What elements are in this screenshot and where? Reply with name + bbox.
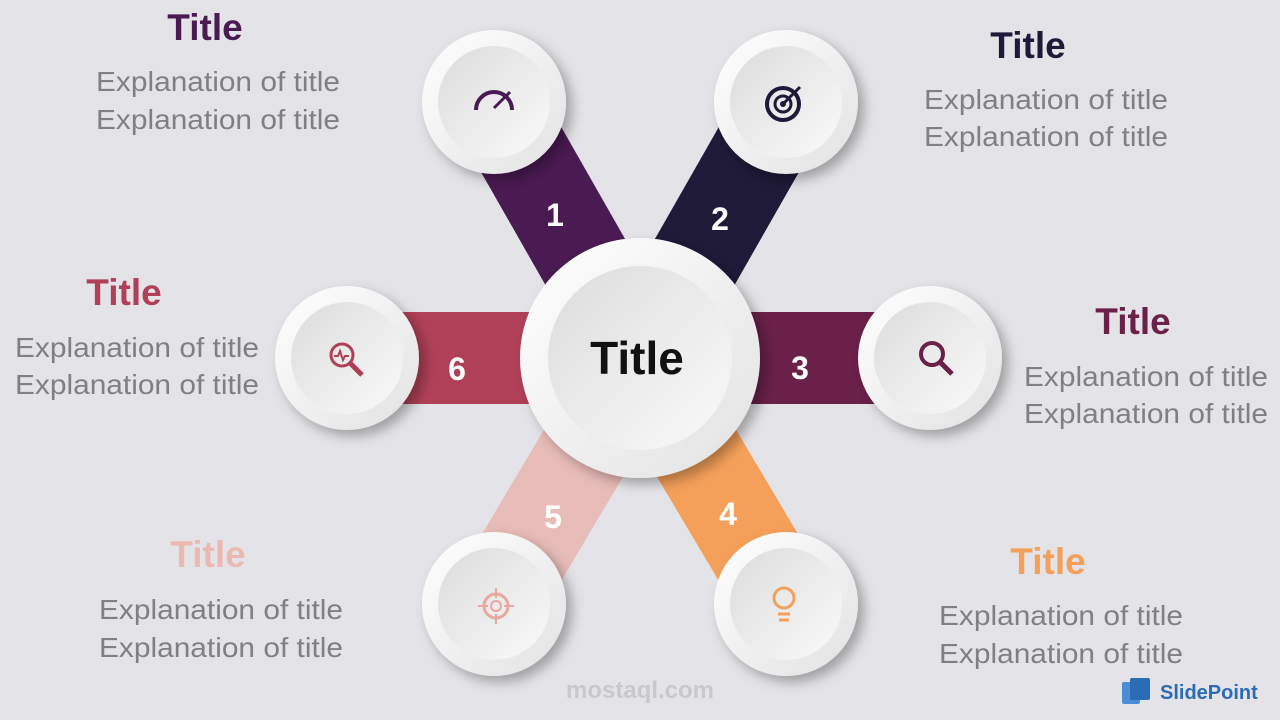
text block 1: Explanation of title bbox=[96, 104, 340, 135]
bar 5 bbox=[494, 358, 640, 604]
text block 5 bbox=[99, 534, 343, 663]
text block 2: Explanation of title bbox=[924, 84, 1168, 115]
bar 2 bbox=[640, 102, 786, 358]
text block 1: Title bbox=[167, 7, 243, 48]
text block 1 bbox=[96, 7, 340, 135]
bar 4 bbox=[640, 358, 786, 604]
text block 4: Explanation of title bbox=[939, 600, 1183, 631]
text block 4: Title bbox=[1010, 541, 1086, 582]
number 3: 3 bbox=[791, 350, 809, 386]
text block 5: Explanation of title bbox=[99, 632, 343, 663]
number 4: 4 bbox=[719, 496, 737, 532]
number 2: 2 bbox=[711, 201, 729, 237]
circle 2 with target icon bbox=[714, 30, 858, 174]
bar 6 bbox=[347, 312, 640, 404]
center circle: Title bbox=[590, 332, 684, 384]
center circle bbox=[520, 238, 760, 478]
text block 3: Explanation of title bbox=[1024, 398, 1268, 429]
circle 1 with speedometer icon bbox=[422, 30, 566, 174]
circle 3 with magnifier icon bbox=[858, 286, 1002, 430]
watermark: mostaql.com bbox=[566, 677, 714, 704]
logo: SlidePoint: SlidePoint bbox=[1160, 682, 1258, 704]
text block 6 bbox=[15, 272, 259, 400]
text block 6: Title bbox=[86, 272, 162, 313]
circle 5 with crosshair icon bbox=[422, 532, 566, 676]
text block 4: Explanation of title bbox=[939, 638, 1183, 669]
text block 1: Explanation of title bbox=[96, 66, 340, 97]
text block 3 bbox=[1024, 301, 1268, 429]
bar 1 bbox=[494, 102, 640, 358]
text block 2: Explanation of title bbox=[924, 121, 1168, 152]
circle 6 with analysis icon bbox=[275, 286, 419, 430]
number 1: 1 bbox=[546, 197, 564, 233]
text block 6: Explanation of title bbox=[15, 369, 259, 400]
text block 5: Explanation of title bbox=[99, 594, 343, 625]
text block 3: Explanation of title bbox=[1024, 361, 1268, 392]
text block 4 bbox=[939, 541, 1183, 669]
text block 2 bbox=[924, 25, 1168, 152]
text block 5: Title bbox=[170, 534, 246, 575]
logo: SlidePoint bbox=[1122, 678, 1258, 704]
circle 4 with bulb icon bbox=[714, 532, 858, 676]
text block 2: Title bbox=[990, 25, 1066, 66]
number 5: 5 bbox=[544, 499, 562, 535]
text block 6: Explanation of title bbox=[15, 332, 259, 363]
text block 3: Title bbox=[1095, 301, 1171, 342]
number 6: 6 bbox=[448, 351, 466, 387]
bar 3 bbox=[640, 312, 930, 404]
